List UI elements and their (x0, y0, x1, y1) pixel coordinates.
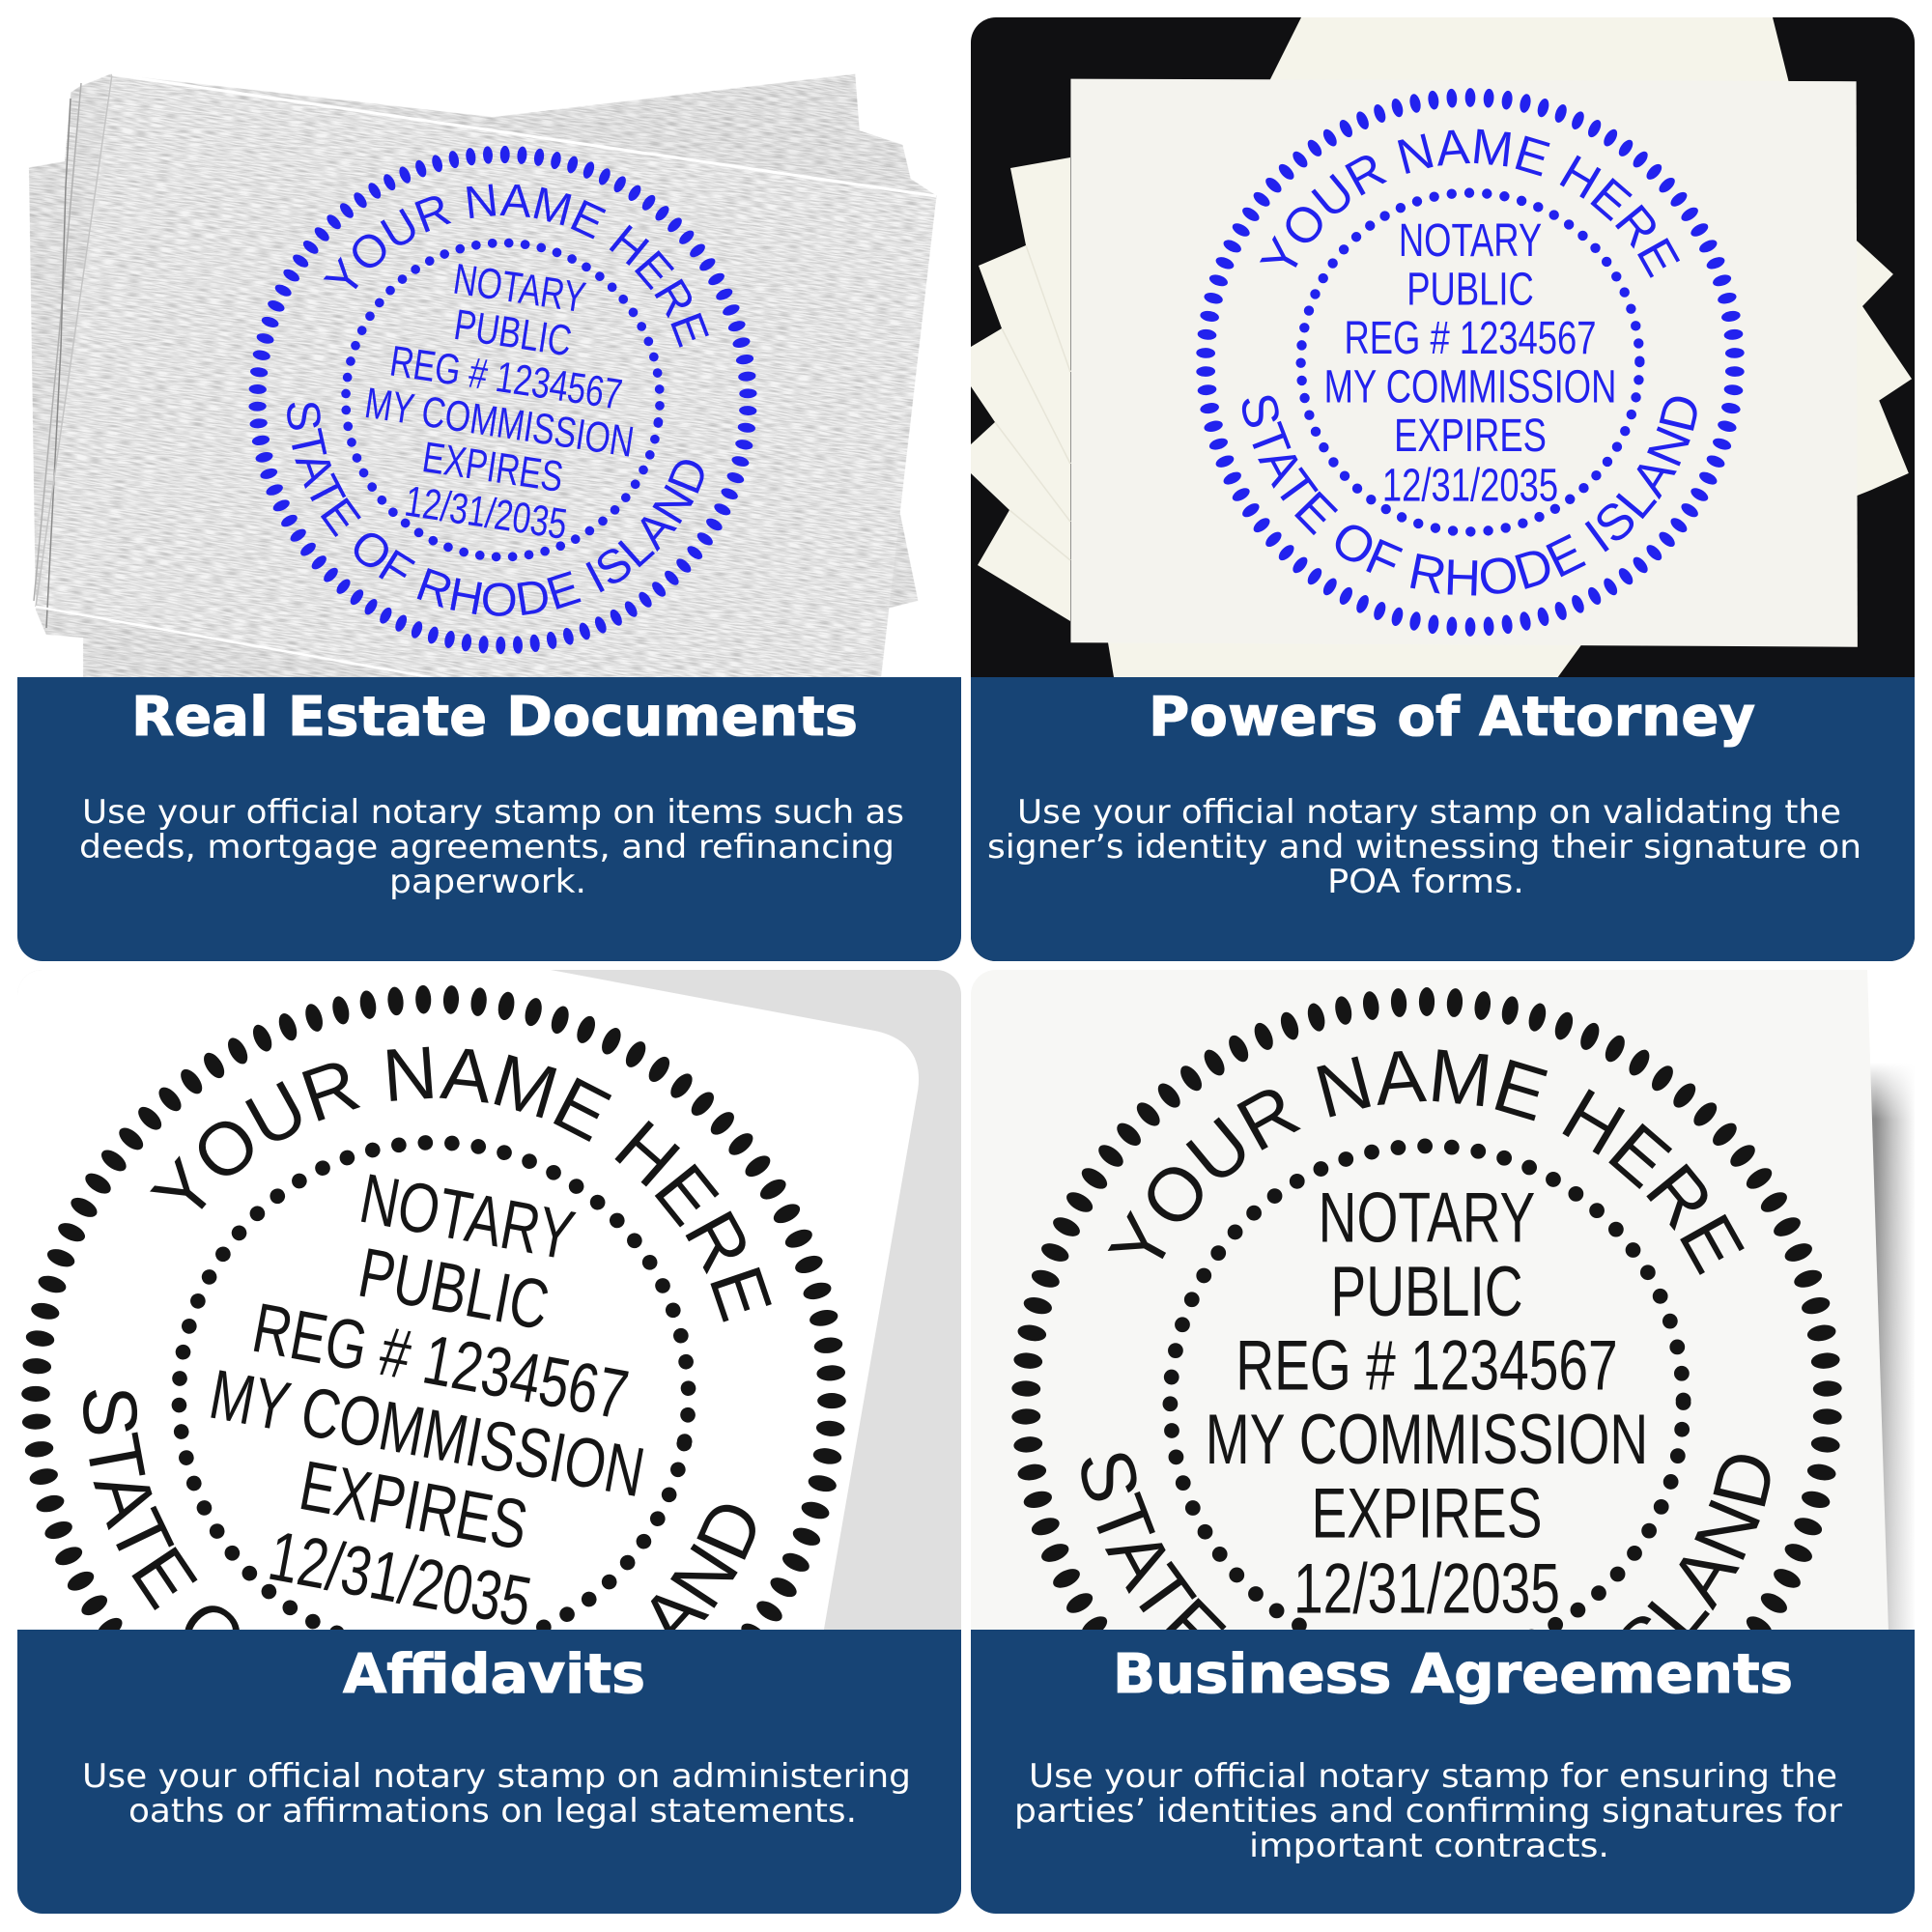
white sheet (13, 966, 919, 1637)
description (79, 793, 904, 901)
description: Use your official notary stamp on validating the (1017, 793, 1841, 832)
panel: real estate documents (17, 73, 961, 961)
black round notary stamp: 12/31/2035 (1293, 1548, 1560, 1628)
blue round notary stamp: NOTARY (450, 255, 588, 322)
black round notary stamp: YOUR NAME HERE (129, 977, 826, 1344)
panel: powers of attorney (971, 14, 1915, 961)
top card (1070, 79, 1858, 647)
image: white sheet with black stamp (0, 842, 968, 1932)
blue round notary stamp: PUBLIC (451, 300, 575, 366)
description (82, 1757, 911, 1831)
blue round notary stamp (1151, 46, 1774, 676)
description: POA forms. (1327, 863, 1524, 901)
black round notary stamp: STATE OF RHODE ISLAND (10, 1368, 784, 1825)
description: paperwork. (389, 863, 586, 901)
caption bar (971, 1630, 1915, 1914)
image: paper with shadow and black stamp (942, 923, 1922, 1879)
blue round notary stamp: STATE OF RHODE ISLAND (287, 402, 704, 616)
black round notary stamp: REG # 1234567 (247, 1288, 634, 1435)
black round notary stamp: STATE OF RHODE ISLAND (1062, 1440, 1793, 1773)
black round notary stamp: NOTARY (355, 1158, 581, 1275)
black round notary stamp: PUBLIC (353, 1233, 554, 1345)
card edge lines (995, 245, 1070, 560)
black round notary stamp: YOUR NAME HERE (1093, 1032, 1761, 1286)
black round notary stamp: REG # 1234567 (1236, 1325, 1618, 1406)
caption bar (17, 1630, 961, 1914)
description: oaths or affirmations on legal statements. (128, 1792, 857, 1831)
blue round notary stamp: EXPIRES (1394, 410, 1547, 462)
blue round notary stamp: PUBLIC (1406, 264, 1534, 316)
description: Use your official notary stamp on items such as (82, 793, 904, 832)
description: deeds, mortgage agreements, and refinancing (79, 828, 895, 867)
description (1014, 1757, 1842, 1865)
description: important contracts. (1249, 1827, 1609, 1865)
description: Use your official notary stamp on administering (82, 1757, 911, 1796)
black round notary stamp: MY COMMISSION (1206, 1399, 1648, 1479)
description: signer’s identity and witnessing their signature on (987, 828, 1861, 867)
heading: Business Agreements (1113, 1643, 1793, 1706)
image: stacked textured paper with blue stamp (29, 73, 937, 677)
black round notary stamp: EXPIRES (294, 1446, 533, 1565)
description: parties’ identities and confirming signatures for (1014, 1792, 1842, 1831)
image: fanned cream cards with blue stamp (971, 14, 1912, 678)
black round notary stamp: EXPIRES (1311, 1473, 1543, 1552)
black round notary stamp: 12/31/2035 (263, 1516, 537, 1641)
description (987, 793, 1861, 901)
blue round notary stamp: MY COMMISSION (362, 379, 637, 467)
fanned cards (971, 14, 1912, 678)
sheet edge lines (34, 74, 936, 677)
black round notary stamp: MY COMMISSION (204, 1354, 650, 1512)
black round notary stamp: NOTARY (1319, 1178, 1535, 1257)
paper stack (29, 73, 937, 677)
blue round notary stamp: STATE OF RHODE ISLAND (1228, 387, 1713, 608)
blue round notary stamp: 12/31/2035 (402, 477, 570, 549)
blue round notary stamp: REG # 1234567 (387, 337, 625, 419)
blue round notary stamp: YOUR NAME HERE (1260, 129, 1681, 278)
heading: Real Estate Documents (131, 686, 858, 749)
caption bar (17, 677, 961, 961)
blue round notary stamp: REG # 1234567 (1344, 312, 1597, 365)
blue round notary stamp: MY COMMISSION (1324, 361, 1616, 413)
black round notary stamp: PUBLIC (1330, 1251, 1523, 1331)
caption bar (971, 677, 1915, 961)
heading: Powers of Attorney (1149, 686, 1755, 749)
description: Use your official notary stamp for ensuring the (1029, 1757, 1837, 1796)
blue round notary stamp (248, 145, 757, 655)
paper shadow (1864, 1063, 1922, 1633)
blue round notary stamp: 12/31/2035 (1382, 460, 1558, 512)
blue round notary stamp: EXPIRES (419, 434, 566, 501)
black round notary stamp (0, 842, 968, 1932)
paper sheet (971, 970, 1889, 1633)
panel: business agreements (942, 923, 1922, 1914)
panel: affidavits (0, 842, 968, 1932)
black round notary stamp (942, 923, 1886, 1879)
blue round notary stamp: YOUR NAME HERE (323, 184, 709, 348)
heading: Affidavits (343, 1643, 645, 1706)
blue round notary stamp: NOTARY (1399, 214, 1542, 267)
